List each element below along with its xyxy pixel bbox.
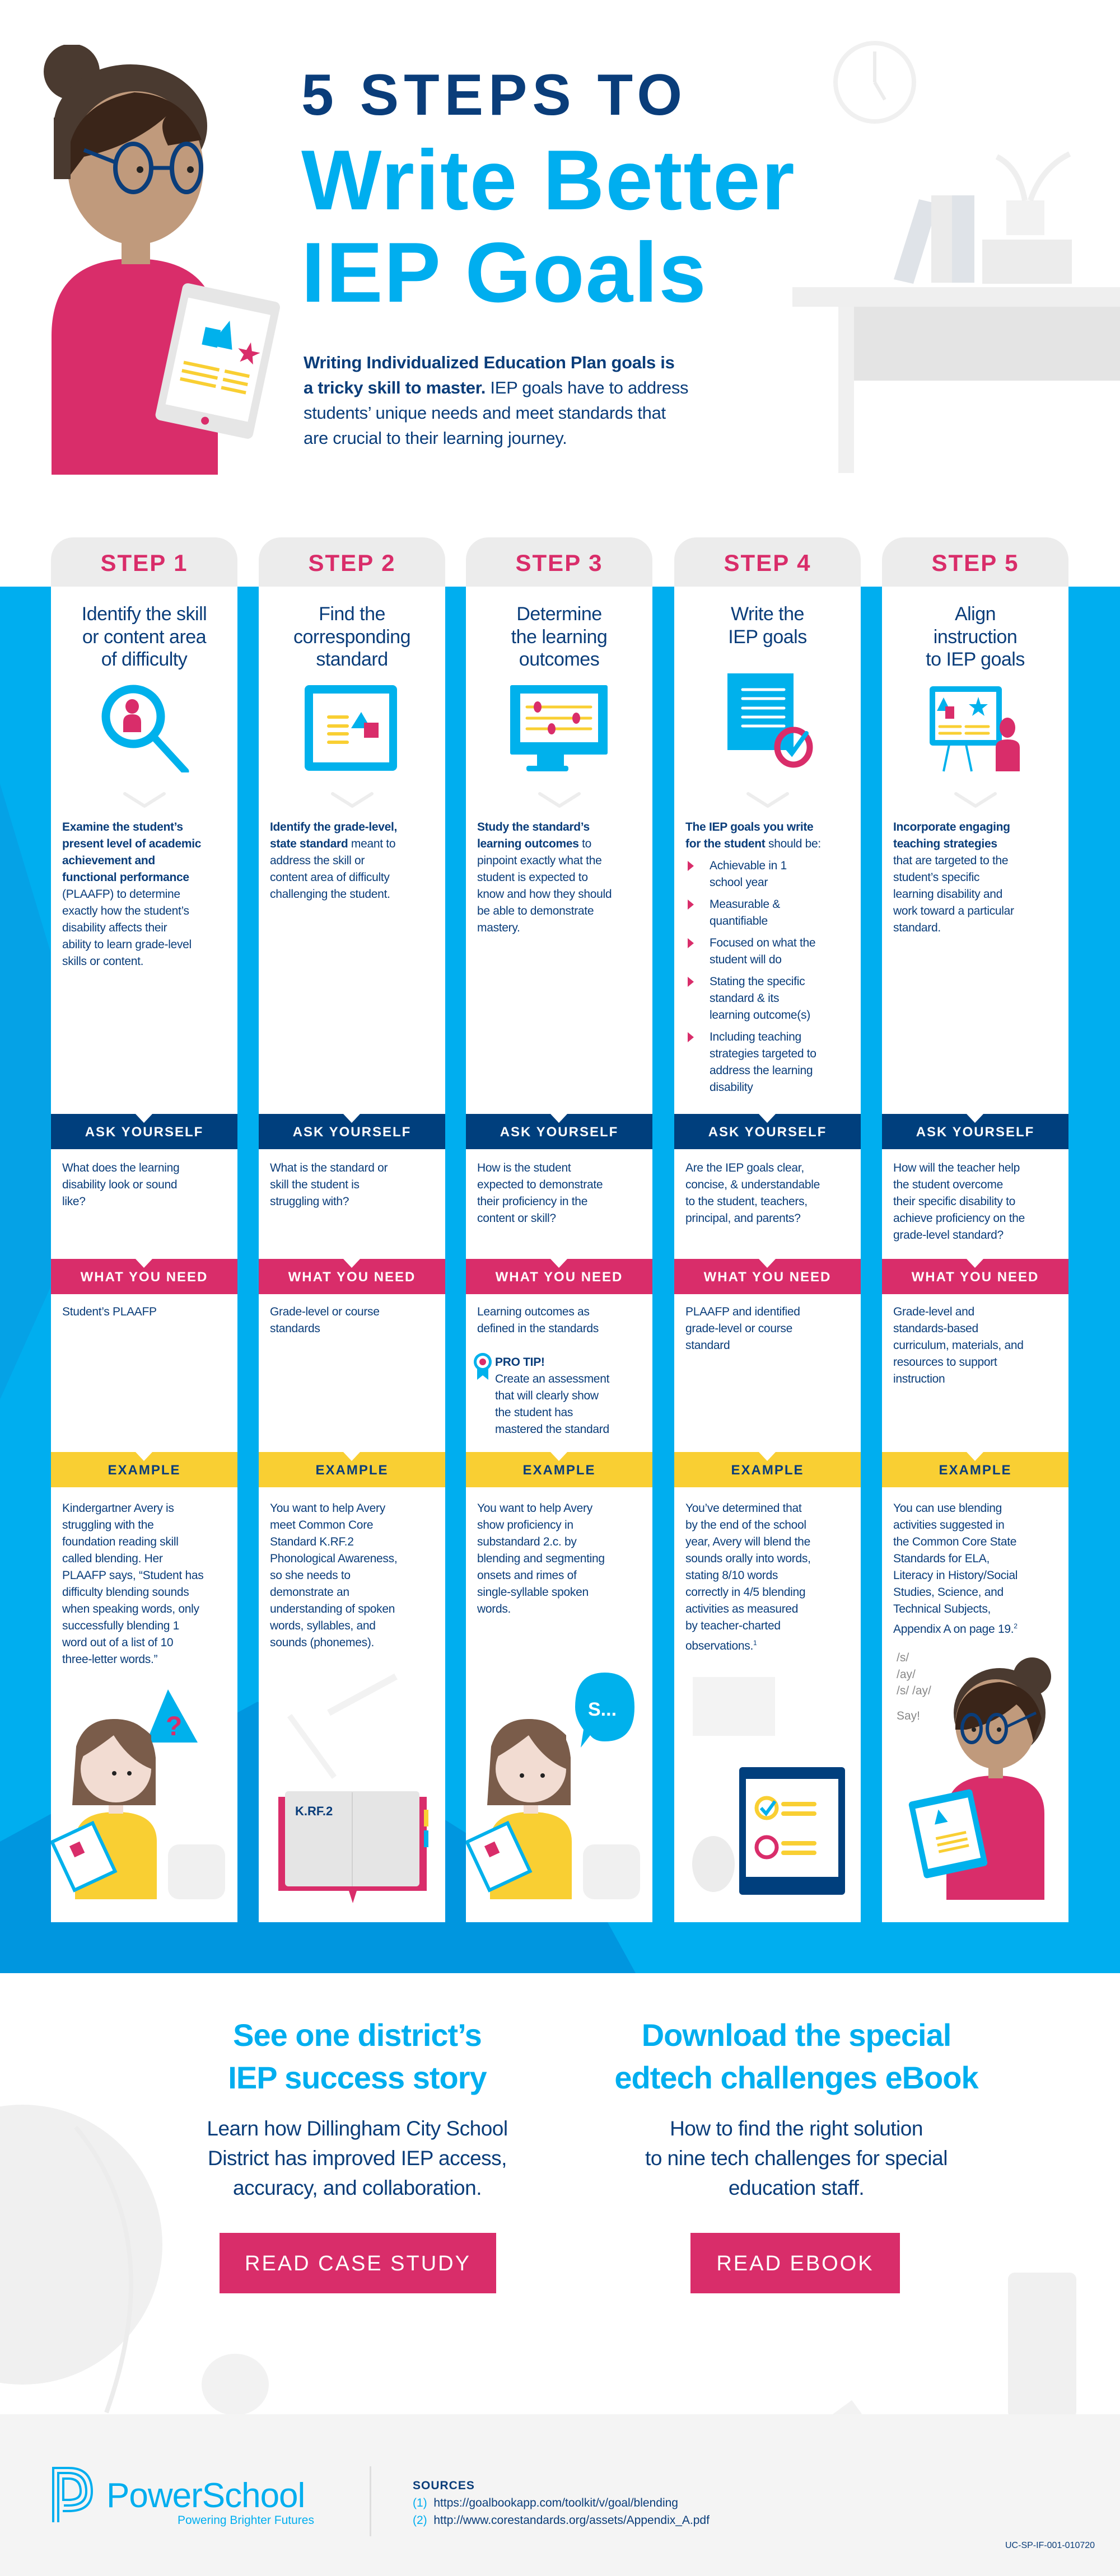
icon: tablet with shapes (305, 685, 397, 771)
step 3 body: learning outcomes to (477, 837, 591, 850)
step 4 body with bullets: standard & its (710, 992, 779, 1005)
panel: step 1: difficulty blending sounds (62, 1586, 189, 1599)
blue band background (0, 587, 1120, 1973)
panel: step 4: stating 8/10 words (685, 1569, 778, 1582)
panel: step 3: their proficiency in the (477, 1195, 587, 1208)
illustration: teacher saying sounds: /s/ /ay/ (897, 1684, 931, 1697)
step 5 body: student’s specific (893, 871, 979, 884)
panel: step 5: the Common Core State (893, 1535, 1016, 1548)
callout: case study: Learn how Dillingham City School (207, 2117, 508, 2140)
background decor: globe and jar (0, 2105, 1076, 2414)
step 4 heading: Write the (731, 603, 804, 625)
illustration: confused girl: ? (166, 1712, 182, 1741)
step 1 heading: or content area (82, 626, 206, 647)
step 4 label: STEP 4 (724, 550, 811, 576)
logo: PowerSchool (52, 2467, 314, 2527)
panel: step 5: achieve proficiency on the (893, 1212, 1025, 1225)
intro text: students’ unique needs and meet standards that (304, 403, 666, 423)
panel: step 3: blending and segmenting (477, 1552, 605, 1565)
step 1 body: skills or content. (62, 955, 143, 968)
panel: step 1: What does the learning (62, 1161, 179, 1174)
pro tip (474, 1353, 609, 1436)
step 5 heading: to IEP goals (926, 649, 1025, 670)
panel: step 4: standard (685, 1339, 730, 1352)
panel: step 4: by teacher-charted (685, 1619, 781, 1632)
step 5 heading: instruction (934, 626, 1017, 647)
step 1 body: exactly how the student’s (62, 905, 189, 917)
step 2 heading (293, 603, 410, 670)
step 1 heading (82, 603, 207, 670)
icon: magnifier with person (102, 685, 189, 772)
panel: step 3: Learning outcomes as (477, 1305, 590, 1318)
callout: case study: District has improved IEP access, (208, 2147, 507, 2170)
header illustration: woman with tablet (44, 45, 280, 475)
panel: step 4: correctly in 4/5 blending (685, 1586, 805, 1599)
panel: step 4: principal, and parents? (685, 1212, 801, 1225)
pro tip: PRO TIP! (495, 1356, 545, 1369)
panel: step 5: Grade-level and (893, 1305, 974, 1318)
step 4 body with bullets: address the learning (710, 1064, 813, 1077)
button: read case study (220, 2233, 496, 2293)
panel: step 2: standards (270, 1322, 320, 1335)
panel: step 4 (674, 537, 861, 1922)
step 4 body with bullets: student will do (710, 953, 782, 966)
panel: step 4: concise, & understandable (685, 1178, 820, 1191)
panel: step 5: You can use blending (893, 1502, 1002, 1515)
panel: step 3: single-syllable spoken (477, 1586, 589, 1599)
pro tip: that will clearly show (495, 1389, 599, 1402)
step 4 body with bullets: learning outcome(s) (710, 1009, 810, 1022)
title: 5 STEPS TO (301, 63, 687, 128)
step 5 heading: Align (955, 603, 996, 625)
icon: presentation board (930, 686, 1020, 771)
what you need bar (259, 1259, 445, 1294)
example bar: EXAMPLE (731, 1463, 804, 1478)
panel: step 5: Technical Subjects, (893, 1603, 991, 1615)
panel: step 5: activities suggested in (893, 1519, 1005, 1531)
panel: step 3: onsets and rimes of (477, 1569, 577, 1582)
step 3 body: mastery. (477, 921, 520, 934)
step 1 body: (PLAAFP) to determine (62, 888, 180, 901)
intro text: a tricky skill to master. IEP goals have to address (304, 378, 688, 397)
icon: document with check (727, 673, 813, 768)
pro tip: the student has (495, 1406, 573, 1419)
step 1 body: ability to learn grade-level (62, 938, 192, 951)
illustration: teacher saying sounds: /ay/ (897, 1668, 916, 1681)
step 4 heading: IEP goals (728, 626, 807, 647)
what you need bar: WHAT YOU NEED (81, 1270, 208, 1285)
step 3 body: be able to demonstrate (477, 905, 594, 917)
step 1 heading: Identify the skill (82, 603, 207, 625)
sources: SOURCES (413, 2479, 475, 2492)
step 3 body: Study the standard’s (477, 821, 590, 833)
intro text: are crucial to their learning journey. (304, 428, 567, 448)
step 4 body with bullets: Measurable & (710, 898, 780, 911)
step 3 body: know and how they should (477, 888, 612, 901)
panel: step 4: sounds orally into words, (685, 1552, 811, 1565)
title (301, 63, 796, 320)
panel: step 5 (882, 537, 1068, 1922)
panel: step 5: Appendix A on page 19.2 (893, 1622, 1018, 1636)
illustration: teacher saying sounds: /s/ (897, 1651, 909, 1664)
what you need bar (51, 1259, 237, 1294)
callout: case study: accuracy, and collaboration. (233, 2176, 482, 2199)
step 4 body with bullets: Stating the specific (710, 975, 805, 988)
panel: step 4: activities as measured (685, 1603, 798, 1615)
panel: step 2: What is the standard or (270, 1161, 388, 1174)
ask yourself bar (51, 1114, 237, 1149)
panel: step 4: PLAAFP and identified (685, 1305, 800, 1318)
callout: ebook: to nine tech challenges for special (645, 2147, 948, 2170)
what you need bar (674, 1259, 861, 1294)
example bar (882, 1452, 1068, 1487)
step 5 body: Incorporate engaging (893, 821, 1010, 833)
panel: step 3: content or skill? (477, 1212, 556, 1225)
what you need bar: WHAT YOU NEED (912, 1270, 1039, 1285)
document code: UC-SP-IF-001-010720 (1005, 2541, 1095, 2550)
panel: step 1: three-letter words.” (62, 1653, 157, 1666)
step 3 heading: Determine (516, 603, 602, 625)
step 1 body: Examine the student’s (62, 821, 183, 833)
panel: step 2: meet Common Core (270, 1519, 373, 1531)
ask yourself bar: ASK YOURSELF (85, 1125, 203, 1140)
step 4 body with bullets: The IEP goals you write (685, 821, 813, 833)
what you need bar: WHAT YOU NEED (496, 1270, 623, 1285)
step 2 body (270, 821, 397, 901)
panel: step 5: their specific disability to (893, 1195, 1015, 1208)
panel: step 3: words. (477, 1603, 511, 1615)
panel: step 2: You want to help Avery (270, 1502, 385, 1515)
panel: step 3 (466, 537, 652, 1922)
step 2 heading: corresponding (293, 626, 410, 647)
step 3 heading: the learning (511, 626, 607, 647)
panel: step 2: Phonological Awareness, (270, 1552, 397, 1565)
callout: case study: See one district’s (233, 2017, 482, 2053)
step 1 body: present level of academic (62, 837, 201, 850)
logo: PowerSchool: Powering Brighter Futures (178, 2514, 314, 2527)
step 1 body (62, 821, 201, 968)
step 2 label: STEP 2 (309, 550, 395, 576)
panel: step 3: expected to demonstrate (477, 1178, 603, 1191)
step 2 body: state standard meant to (270, 837, 395, 850)
step 5 body: teaching strategies (893, 837, 997, 850)
ask yourself bar (259, 1114, 445, 1149)
ask yourself bar (674, 1114, 861, 1149)
step 1 body: achievement and (62, 854, 155, 867)
step 4 body with bullets: Focused on what the (710, 936, 815, 949)
step 3 body: student is expected to (477, 871, 588, 884)
step 3 heading: outcomes (519, 649, 599, 670)
panel: step 5: Literacy in History/Social (893, 1569, 1018, 1582)
example bar: EXAMPLE (522, 1463, 596, 1478)
panel: step 4: Are the IEP goals clear, (685, 1161, 804, 1174)
callout: case study: IEP success story (228, 2060, 487, 2095)
panel: step 2: understanding of spoken (270, 1603, 395, 1615)
panel: step 4: You’ve determined that (685, 1502, 801, 1515)
step 4 body with bullets: disability (710, 1081, 753, 1094)
panel: step 5: the student overcome (893, 1178, 1003, 1191)
panel: step 4: year, Avery will blend the (685, 1535, 810, 1548)
panel: step 2: skill the student is (270, 1178, 360, 1191)
panel: step 3: You want to help Avery (477, 1502, 592, 1515)
step 1 label: STEP 1 (101, 550, 188, 576)
pro tip: mastered the standard (495, 1423, 609, 1436)
panel: step 5: instruction (893, 1373, 945, 1385)
panel: step 1: like? (62, 1195, 86, 1208)
illustration: open book: K.RF.2 (295, 1804, 333, 1818)
illustration: confused girl (51, 1689, 225, 1899)
illustration: open book (278, 1674, 428, 1903)
callout: ebook: How to find the right solution (670, 2117, 923, 2140)
callout: ebook: edtech challenges eBook (614, 2060, 978, 2095)
callout: case study (207, 2017, 508, 2199)
example bar (674, 1452, 861, 1487)
what you need bar: WHAT YOU NEED (704, 1270, 831, 1285)
ask yourself bar: ASK YOURSELF (500, 1125, 618, 1140)
panel: step 3: defined in the standards (477, 1322, 599, 1335)
ask yourself bar: ASK YOURSELF (708, 1125, 827, 1140)
step 5 body: learning disability and (893, 888, 1002, 901)
illustration: girl saying S... (466, 1673, 640, 1899)
step 5 label: STEP 5 (932, 550, 1019, 576)
step 1 heading: of difficulty (101, 649, 187, 670)
panel: step 1: Kindergartner Avery is (62, 1502, 174, 1515)
intro text (304, 353, 688, 448)
panel: step 3: show proficiency in (477, 1519, 573, 1531)
panel: step 5: grade-level standard? (893, 1229, 1004, 1242)
panel: step 1: Student’s PLAAFP (62, 1305, 157, 1318)
panel: step 1: when speaking words, only (62, 1603, 199, 1615)
panel: step 4: to the student, teachers, (685, 1195, 808, 1208)
step 2 body: address the skill or (270, 854, 365, 867)
footer (0, 2414, 1120, 2576)
panel: step 1: disability look or sound (62, 1178, 177, 1191)
example bar (466, 1452, 652, 1487)
button: read ebook (690, 2233, 900, 2293)
panel: step 5: Studies, Science, and (893, 1586, 1004, 1599)
step 3 body: pinpoint exactly what the (477, 854, 601, 867)
panel: step 2: Grade-level or course (270, 1305, 380, 1318)
step 2 body: content area of difficulty (270, 871, 390, 884)
panel: step 4: grade-level or course (685, 1322, 792, 1335)
example bar (259, 1452, 445, 1487)
panel: step 2: sounds (phonemes). (270, 1636, 374, 1649)
step 5 body: work toward a particular (893, 905, 1014, 917)
panel: step 2: words, syllables, and (270, 1619, 376, 1632)
icon: monitor with sliders (510, 685, 608, 771)
step 3 heading (511, 603, 607, 670)
button: read ebook: READ EBOOK (716, 2252, 874, 2275)
step 4 body with bullets: Achievable in 1 (710, 859, 787, 872)
panel: step 5: Standards for ELA, (893, 1552, 990, 1565)
panel: step 1 (51, 537, 237, 1922)
step 2 body: Identify the grade-level, (270, 821, 397, 833)
panel: step 4: by the end of the school (685, 1519, 806, 1531)
illustration: teacher saying sounds (897, 1651, 1051, 1900)
example bar: EXAMPLE (939, 1463, 1011, 1478)
illustration: phone checklist (692, 1677, 845, 1895)
panel: step 5: resources to support (893, 1356, 997, 1369)
step 4 body with bullets: strategies targeted to (710, 1047, 816, 1060)
panel: step 1: PLAAFP says, “Student has (62, 1569, 203, 1582)
what you need bar (466, 1259, 652, 1294)
step 5 body (893, 821, 1014, 934)
panel: step 5: curriculum, materials, and (893, 1339, 1024, 1352)
panel: step 1: struggling with the (62, 1519, 154, 1531)
panel: step 2: struggling with? (270, 1195, 349, 1208)
step 2 heading: Find the (319, 603, 385, 625)
step 3 body (477, 821, 612, 934)
icon: ribbon badge (474, 1353, 492, 1380)
sources: (2) http://www.corestandards.org/assets/Appendix_A.pdf (413, 2514, 710, 2527)
example bar (51, 1452, 237, 1487)
step 2 body: challenging the student. (270, 888, 390, 901)
panel: step 5: How will the teacher help (893, 1161, 1020, 1174)
example bar: EXAMPLE (315, 1463, 389, 1478)
panel: step 2: demonstrate an (270, 1586, 349, 1599)
callout: ebook: education staff. (729, 2176, 864, 2199)
step 4 body with bullets: for the student should be: (685, 837, 821, 850)
step 4 body with bullets: quantifiable (710, 915, 768, 928)
what you need bar (882, 1259, 1068, 1294)
illustration: teacher saying sounds: Say! (897, 1709, 920, 1722)
panel: step 2: Standard K.RF.2 (270, 1535, 354, 1548)
step 5 body: that are targeted to the (893, 854, 1008, 867)
step 4 body with bullets: Including teaching (710, 1031, 801, 1043)
callout: ebook (614, 2017, 979, 2199)
panel: step 4: observations.1 (685, 1639, 757, 1652)
sources: (1) https://goalbookapp.com/toolkit/v/goal/blending (413, 2497, 678, 2509)
panel: step 1: called blending. Her (62, 1552, 163, 1565)
panel: step 2 (259, 537, 445, 1922)
callout: ebook: Download the special (642, 2017, 951, 2053)
ask yourself bar: ASK YOURSELF (293, 1125, 411, 1140)
pro tip: Create an assessment (495, 1373, 609, 1385)
step 1 body: disability affects their (62, 921, 167, 934)
ask yourself bar (466, 1114, 652, 1149)
intro text: Writing Individualized Education Plan goals is (304, 353, 675, 372)
step 2 heading: standard (316, 649, 388, 670)
title: IEP Goals (301, 225, 707, 320)
panel: step 2: so she needs to (270, 1569, 351, 1582)
panel: step 3: substandard 2.c. by (477, 1535, 577, 1548)
ask yourself bar: ASK YOURSELF (916, 1125, 1034, 1140)
panel: step 1: foundation reading skill (62, 1535, 179, 1548)
panel: step 5: standards-based (893, 1322, 978, 1335)
example bar: EXAMPLE (108, 1463, 180, 1478)
step 4 heading (728, 603, 807, 647)
panel: step 1: successfully blending 1 (62, 1619, 179, 1632)
step 1 body: functional performance (62, 871, 189, 884)
step 4 body with bullets: school year (710, 876, 768, 889)
step 3 label: STEP 3 (516, 550, 603, 576)
logo: PowerSchool: PowerSchool (106, 2476, 305, 2515)
panel: step 1: word out of a list of 10 (62, 1636, 173, 1649)
step 5 heading (926, 603, 1025, 670)
ask yourself bar (882, 1114, 1068, 1149)
title: Write Better (301, 133, 796, 228)
panel: step 3: How is the student (477, 1161, 571, 1174)
button: read case study: READ CASE STUDY (245, 2252, 471, 2275)
illustration: girl saying S...: S... (588, 1699, 617, 1720)
step 4 body with bullets (685, 821, 821, 1094)
step 5 body: standard. (893, 921, 941, 934)
background decor: clock and desk (792, 41, 1120, 473)
sources (413, 2479, 710, 2527)
what you need bar: WHAT YOU NEED (288, 1270, 416, 1285)
